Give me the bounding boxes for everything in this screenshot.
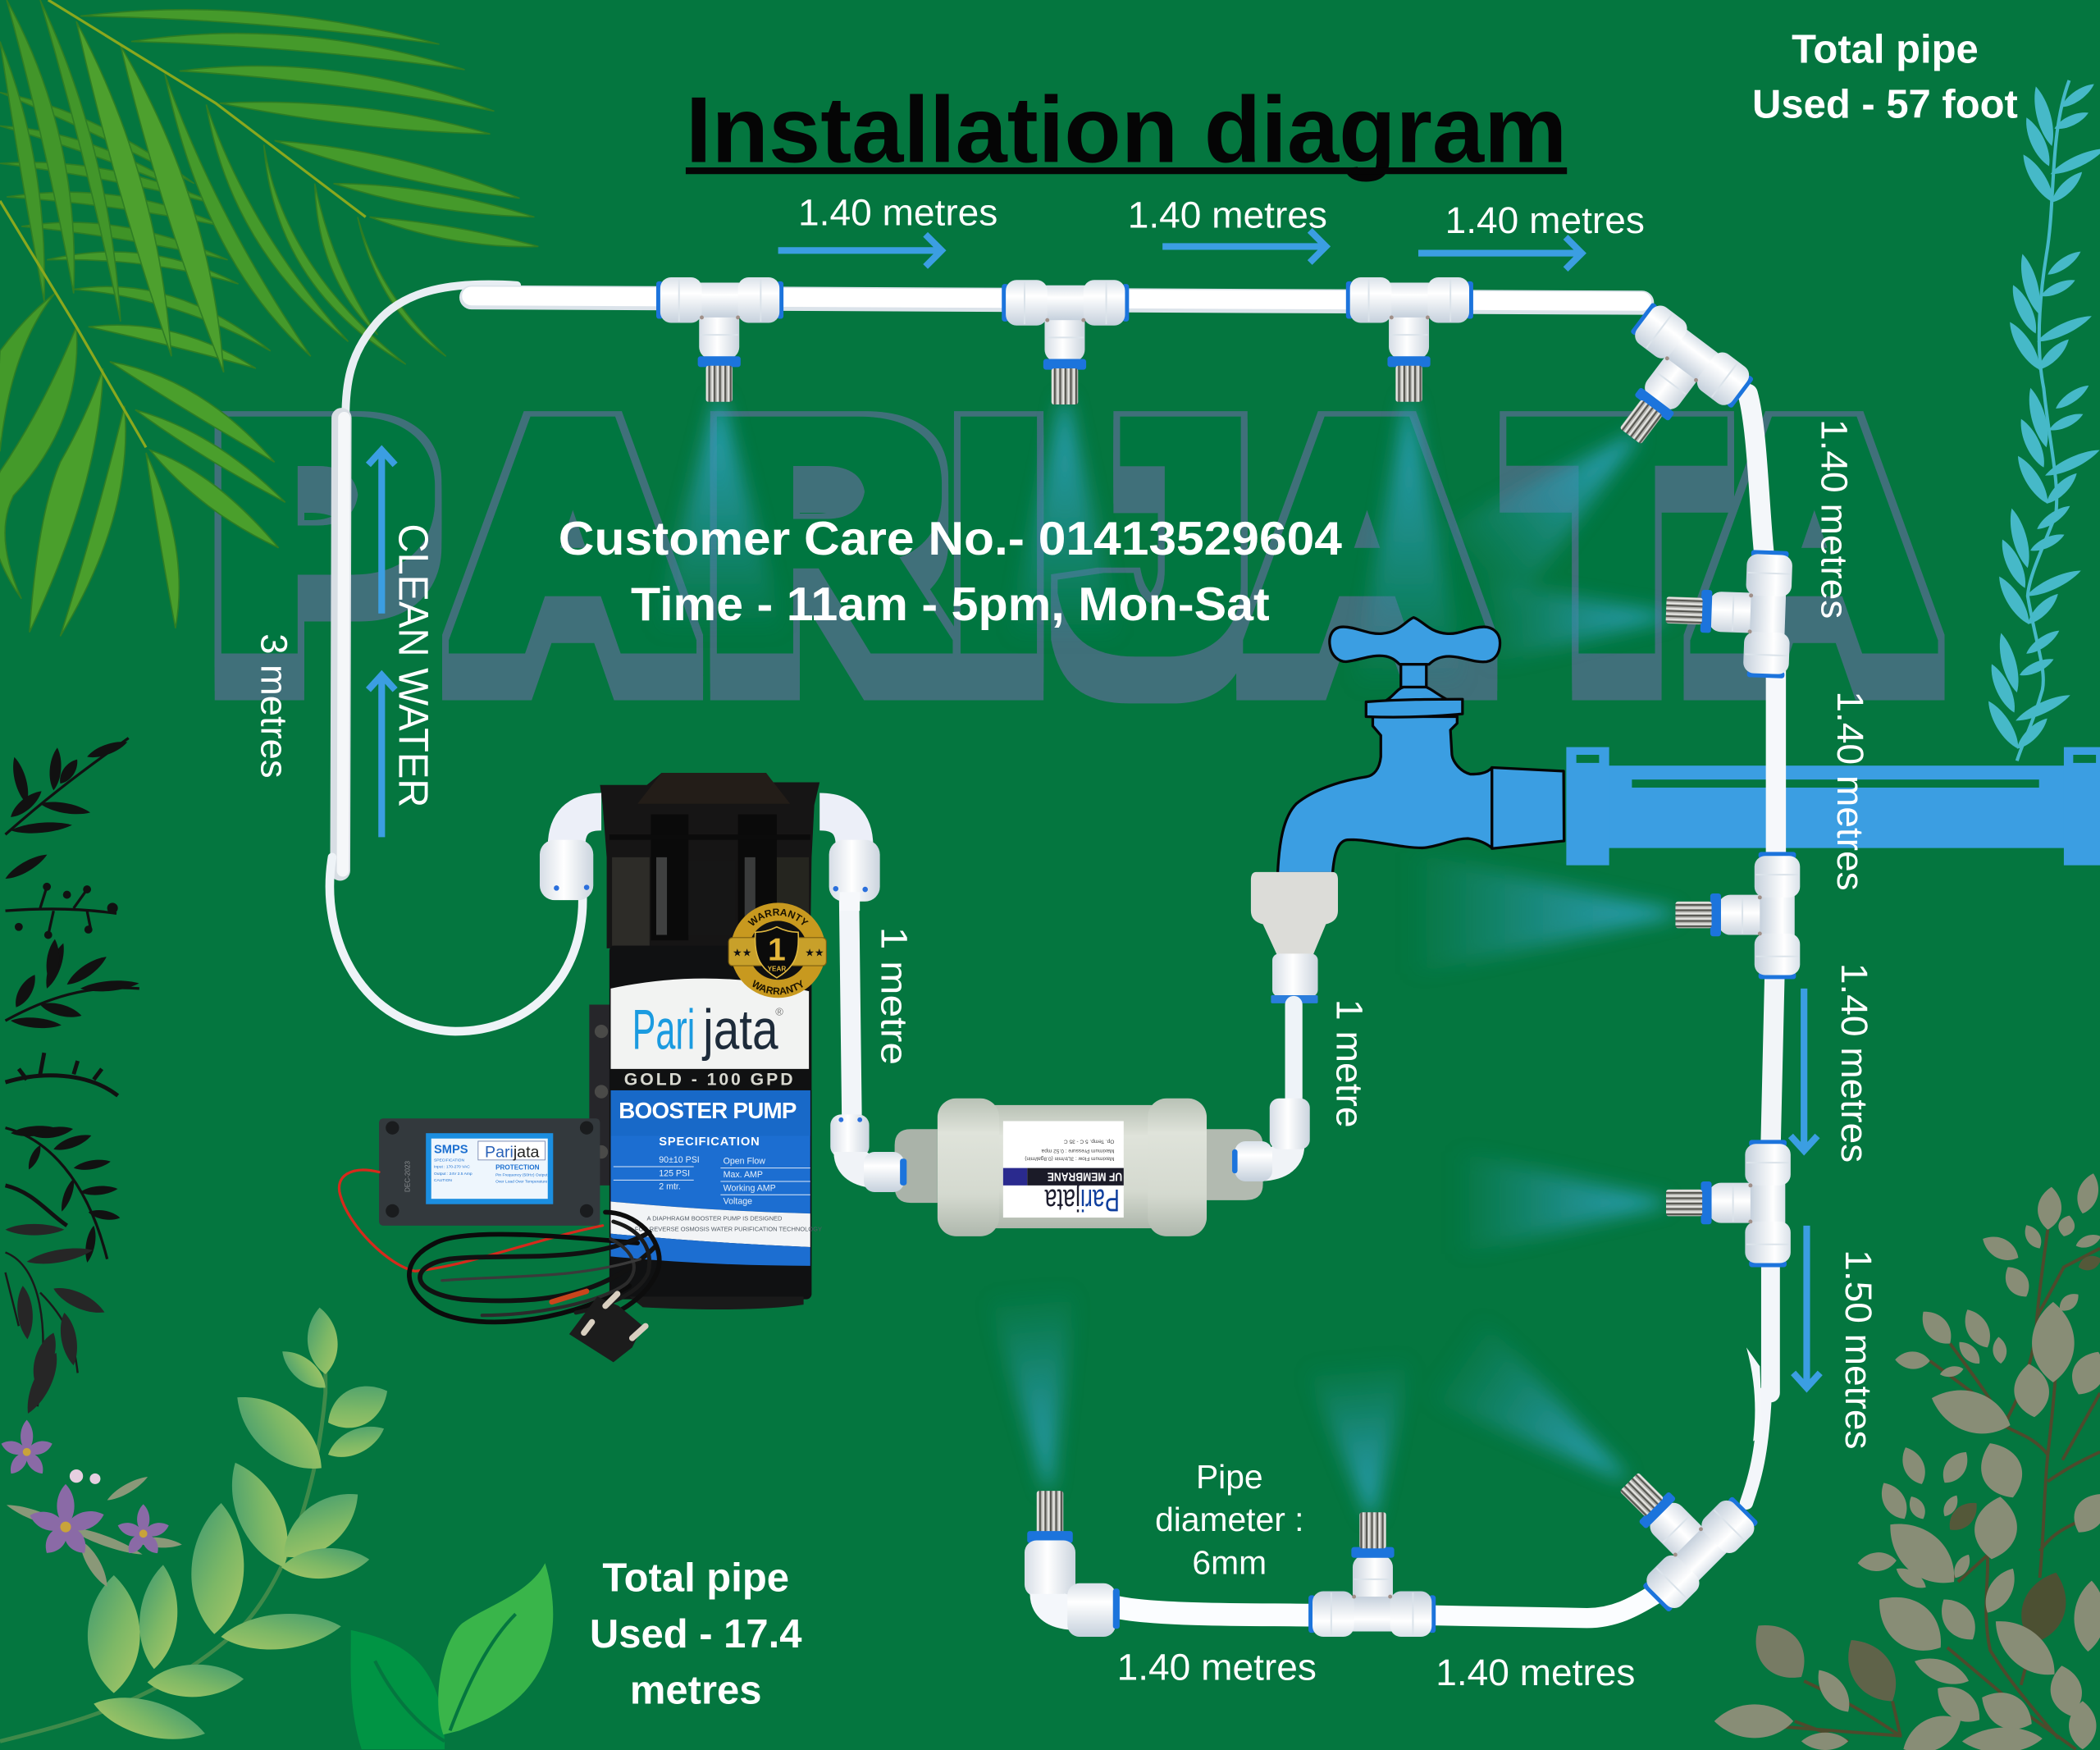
pipe diameter note: diameter :	[1155, 1501, 1303, 1538]
red wire	[339, 1170, 603, 1271]
flow arrows	[368, 231, 1820, 1387]
sprig 3	[6, 939, 139, 1030]
top labels: 1.40 metres	[798, 191, 998, 233]
sprig 1	[6, 738, 129, 835]
lower stripe copy: A DIAPHRAGM BOOSTER PUMP IS DESIGNED	[647, 1214, 783, 1222]
white mist-line tubing	[330, 285, 1776, 1618]
pump head	[600, 773, 819, 948]
tee fittings and nozzles	[656, 277, 1800, 1637]
warranty badge: 1	[768, 933, 786, 968]
tee 6	[1675, 852, 1800, 979]
pipe diameter note: Pipe	[1196, 1458, 1263, 1496]
sprig 4 curly	[6, 1053, 118, 1095]
white label	[610, 979, 809, 1069]
arrow top 3	[1418, 237, 1582, 269]
total pipe 57 foot	[1752, 28, 2018, 127]
SMPS power adapter: DEC-2023	[404, 1160, 412, 1192]
brand name: jata	[701, 998, 778, 1061]
adapter label	[426, 1133, 553, 1204]
warranty badge: WARRANTY	[747, 909, 809, 925]
arrow right down 2	[1793, 1226, 1820, 1387]
SMPS power adapter: CAUTION	[434, 1178, 452, 1183]
SMPS power adapter: Pin Frequency (50Hz) Output	[495, 1172, 548, 1177]
right vertical tubing	[1748, 394, 1764, 552]
SMPS power adapter: Input : 170-270 VAC	[434, 1165, 470, 1170]
arrow right down 1	[1791, 989, 1818, 1150]
specification table: Working AMP	[724, 1183, 776, 1193]
pump outlet tube	[849, 900, 851, 1114]
specification table: Voltage	[724, 1197, 752, 1207]
measurement labels: 1.40 metres	[1829, 691, 1871, 891]
SMPS power adapter: Over Load Over Temperature	[495, 1180, 548, 1185]
measurement labels: 1.40 metres	[1833, 963, 1875, 1163]
tube sleeve, lower right	[1746, 1347, 1763, 1442]
right elbow	[819, 811, 855, 847]
UF membrane filter: Op. Temp. 5 C - 35 C	[1064, 1138, 1114, 1144]
arrow top 2	[1162, 231, 1326, 263]
UF membrane filter: Maximum Flow : 3Ltr/min (0.8gal/min)	[1025, 1156, 1114, 1162]
specification table: Open Flow	[724, 1157, 765, 1167]
left vertical sleeve	[340, 418, 341, 870]
right filter elbow	[1256, 1145, 1289, 1165]
title: Installation diagram	[686, 79, 1567, 183]
water tap	[1278, 618, 1564, 873]
specification table: 125 PSI	[659, 1168, 690, 1178]
customer care text: Time - 11am - 5pm, Mon-Sat	[631, 578, 1270, 631]
branches	[1728, 1230, 2100, 1749]
watercolour branch, bottom left	[0, 1306, 396, 1750]
tap connector	[1492, 767, 1564, 848]
registered mark: ®	[775, 1006, 783, 1018]
plug	[552, 1291, 646, 1362]
lower elbow	[830, 1114, 870, 1158]
measurement labels: 1.40 metres	[1445, 199, 1645, 241]
measurement labels	[253, 191, 1879, 1693]
UF membrane filter	[851, 1099, 1310, 1236]
arrow left up 2	[368, 675, 395, 837]
brand name: Pari	[632, 998, 695, 1061]
measurement labels: CLEAN WATER	[390, 523, 437, 807]
warranty badge: YEAR	[768, 966, 786, 973]
sprig 2 with berries	[2, 850, 118, 939]
SMPS power adapter: Parijata	[485, 1144, 540, 1162]
tee 8 corner	[1583, 1437, 1761, 1615]
elbow and nozzle, bottom left of loop	[1025, 1491, 1120, 1637]
pipe diameter note	[1155, 1458, 1303, 1581]
pump mounting bracket	[589, 1004, 614, 1186]
warranty badge: ★★	[805, 947, 824, 959]
bottom run	[1112, 1606, 1319, 1615]
blue specification panel	[610, 1090, 810, 1213]
SMPS power adapter: PROTECTION	[495, 1163, 540, 1171]
lower stripe copy: FOR REVERSE OSMOSIS WATER PURIFICATION TECHNOLOGY	[635, 1225, 822, 1232]
SMPS power adapter: SPECIFICATION	[434, 1158, 464, 1163]
specification heading: SPECIFICATION	[659, 1135, 760, 1149]
tee 1	[656, 277, 783, 402]
bottom labels: 1.40 metres	[1117, 1646, 1317, 1688]
tube labels: 1 metre	[873, 927, 915, 1065]
top run	[472, 297, 1642, 303]
measurement labels: 1.40 metres	[1128, 194, 1327, 236]
left elbow	[567, 811, 601, 847]
palm frond, top left	[0, 0, 538, 636]
arrow left up 1	[368, 450, 395, 614]
total pipe 17.4 metres	[590, 1556, 801, 1713]
SMPS power adapter: SMPS	[434, 1144, 468, 1157]
UF membrane filter: Parijata	[1044, 1183, 1120, 1218]
model band: GOLD - 100 GPD	[624, 1070, 793, 1089]
tee 3	[1346, 277, 1473, 402]
main blue water pipe	[1566, 747, 2100, 866]
outlet tube head	[840, 892, 860, 911]
olive foliage, bottom right	[1714, 1171, 2100, 1750]
thin supply curve	[345, 285, 517, 418]
specification table	[614, 1155, 810, 1207]
customer care text	[559, 513, 1342, 631]
sprig 5	[6, 1124, 121, 1263]
specification table: 90±10 PSI	[659, 1155, 700, 1165]
pump elbow fittings	[540, 811, 880, 1158]
pump cylinder	[609, 946, 811, 1300]
tee 2	[1002, 280, 1129, 404]
SMPS power adapter: Output : 24V 2.5 Amp	[434, 1172, 472, 1177]
tee 5	[1664, 547, 1793, 679]
total pipe 17.4 metres: Total pipe	[602, 1556, 789, 1601]
cables and plug	[339, 1170, 660, 1362]
specification table: Max. AMP	[724, 1170, 763, 1180]
black botanical sprigs, left edge	[2, 738, 139, 1417]
UF membrane filter: Maximum Pressure : 0.52 mpa	[1041, 1148, 1114, 1154]
lower U bend	[330, 857, 582, 1031]
white lower stripe	[610, 1201, 810, 1247]
warranty badge: WARRANTY	[752, 980, 803, 994]
booster pump heading: BOOSTER PUMP	[619, 1098, 797, 1123]
black cable loops	[409, 1234, 637, 1322]
booster pump	[589, 773, 822, 1309]
customer care text: Customer Care No.- 01413529604	[559, 513, 1342, 565]
teal fern, right edge	[1983, 80, 2100, 761]
green logo leaves, bottom	[350, 1563, 553, 1749]
warranty badge	[728, 902, 827, 998]
specification table: 2 mtr.	[659, 1182, 681, 1192]
lower stripe copy	[635, 1214, 822, 1232]
tee 4 corner	[1580, 299, 1756, 475]
tee 9	[1308, 1512, 1436, 1637]
right side labels: 1.40 metres	[1813, 419, 1855, 619]
left labels: 3 metres	[253, 633, 294, 779]
sprig 6	[6, 1224, 107, 1417]
measurement labels: 1 metre	[1328, 999, 1370, 1128]
filter outlet tube	[1289, 1004, 1299, 1105]
left filter elbow	[851, 1152, 884, 1172]
pipe diameter note: 6mm	[1192, 1543, 1267, 1581]
measurement labels: 1.50 metres	[1838, 1250, 1879, 1449]
total pipe 57 foot: Used - 57 foot	[1752, 83, 2018, 127]
total pipe 57 foot: Total pipe	[1792, 28, 1979, 72]
tap handle	[1330, 618, 1500, 665]
UF membrane filter: UF MEMBRANE	[1048, 1169, 1122, 1182]
spray mist	[649, 389, 1675, 1521]
filter label	[1003, 1121, 1124, 1218]
tap adapter	[1251, 872, 1338, 1003]
arrow top 1	[778, 235, 942, 267]
blue base stripe	[610, 1234, 810, 1266]
SMPS power adapter	[379, 1118, 600, 1226]
total pipe 17.4 metres: Used - 17.4	[590, 1612, 801, 1656]
tee 7	[1666, 1140, 1791, 1267]
total pipe 17.4 metres: metres	[630, 1669, 761, 1713]
tap body	[1278, 716, 1492, 873]
measurement labels: 1.40 metres	[1436, 1652, 1635, 1693]
purple flowers, bottom left	[0, 1420, 182, 1590]
warranty badge: ★★	[733, 947, 751, 959]
watermark: PARIJATA: PARIJATA	[214, 354, 1932, 717]
